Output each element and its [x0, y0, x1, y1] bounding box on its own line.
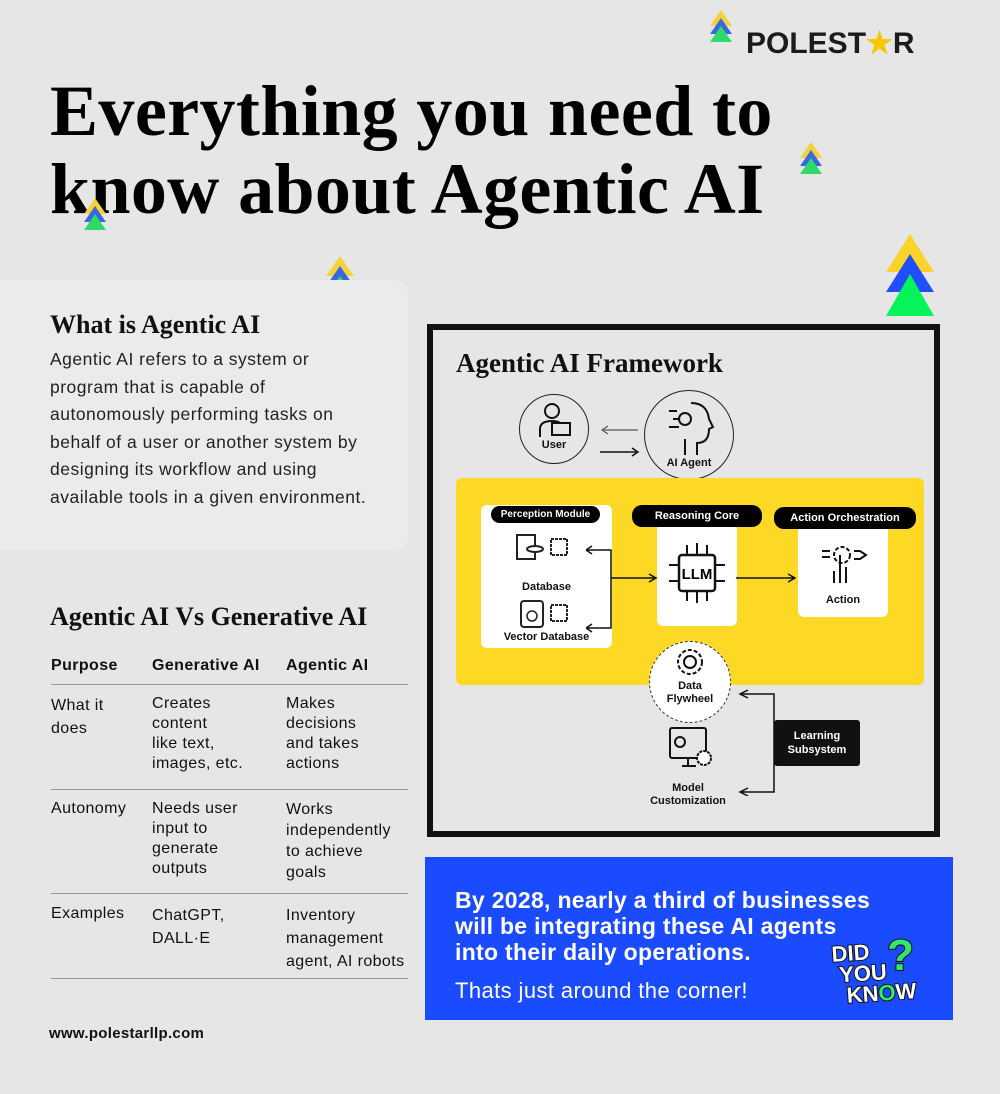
table [51, 657, 408, 979]
panel: what is agentic AI [0, 280, 408, 550]
heading: vs: Agentic AI Vs Generative AI [50, 602, 367, 631]
model customization [650, 727, 726, 807]
icon: user [519, 394, 589, 464]
text block: behalf of a user or another system by [50, 432, 357, 452]
icon: AI agent: AI Agent [667, 457, 711, 469]
table: What it [51, 697, 104, 714]
callout: did you know [425, 857, 953, 1020]
icon: user: User [542, 439, 566, 451]
model customization: Customization [650, 795, 726, 807]
action orchestration [798, 525, 888, 617]
icon: did you know badge: YOU [838, 959, 888, 987]
reasoning core [657, 523, 737, 626]
arrows [586, 545, 796, 633]
table: Inventory [286, 907, 355, 924]
panel: framework [427, 324, 940, 837]
perception module: Database [522, 581, 571, 593]
text block: available tools in a given environment. [50, 486, 366, 506]
table: Generative AI [152, 657, 260, 674]
decorative arrows [800, 142, 822, 174]
table: to achieve [286, 843, 363, 860]
reasoning core: LLM [682, 566, 712, 583]
table: DALL·E [152, 930, 210, 947]
data flywheel: Flywheel [667, 693, 713, 705]
learning subsystem: Learning [794, 730, 840, 742]
icon: did you know badge [831, 931, 917, 1008]
table: decisions [286, 715, 356, 732]
icon: did you know badge: ? [887, 931, 914, 980]
data flywheel [649, 641, 731, 723]
table: agent, AI robots [286, 953, 404, 970]
icon: AI agent [644, 390, 734, 480]
footer url: www.polestarllp.com [49, 1025, 204, 1042]
table: images, etc. [152, 755, 243, 772]
yellow area: Perception Module [501, 509, 590, 520]
icon: did you know badge: DID [831, 939, 870, 967]
icon: did you know badge: KNOW [846, 978, 917, 1008]
text block: program that is capable of [50, 376, 265, 396]
table: actions [286, 755, 340, 772]
data flywheel: Data [678, 680, 702, 692]
heading: What is Agentic AI [50, 310, 260, 339]
callout: did you know: Thats just around the corner! [455, 978, 748, 1003]
icon: arrows [710, 10, 732, 42]
table: goals [286, 864, 326, 881]
table: does [51, 720, 87, 737]
table: Works [286, 801, 333, 818]
table: Purpose [51, 657, 118, 674]
arrows user-agent [600, 426, 640, 457]
table: Makes [286, 695, 335, 712]
action orchestration: Action [826, 594, 860, 606]
table: Creates [152, 695, 211, 712]
model customization: Model [672, 782, 704, 794]
learning subsystem: Subsystem [788, 744, 846, 756]
table: and takes [286, 735, 359, 752]
table: content [152, 715, 207, 732]
learning subsystem [738, 689, 860, 796]
yellow area [456, 478, 924, 685]
table: Needs user [152, 800, 238, 817]
title: know about Agentic AI [50, 149, 765, 229]
table: Agentic AI [286, 657, 369, 674]
callout: did you know: By 2028, nearly a third of businesses [455, 887, 870, 913]
table: management [286, 930, 383, 947]
text block: Agentic AI refers to a system or [50, 349, 309, 369]
table: outputs [152, 860, 207, 877]
table: generate [152, 840, 218, 857]
heading: Agentic AI Framework [456, 348, 723, 378]
yellow area: Action Orchestration [790, 512, 900, 524]
text block [50, 349, 366, 506]
logo [710, 10, 915, 60]
text block: autonomously performing tasks on [50, 404, 334, 424]
table: input to [152, 820, 208, 837]
perception module: Vector Database [504, 631, 589, 643]
table: like text, [152, 735, 215, 752]
table: Autonomy [51, 800, 126, 817]
title [50, 71, 773, 229]
table: independently [286, 822, 391, 839]
table: ChatGPT, [152, 907, 225, 924]
table: Examples [51, 905, 124, 922]
yellow area: Reasoning Core [655, 510, 739, 522]
title: Everything you need to [50, 71, 773, 151]
perception module [481, 505, 612, 648]
callout: did you know: into their daily operations. [455, 939, 751, 965]
callout: did you know: will be integrating these AI agents [455, 913, 837, 939]
text block: designing its workflow and using [50, 459, 317, 479]
logo: POLEST★R [746, 27, 915, 60]
